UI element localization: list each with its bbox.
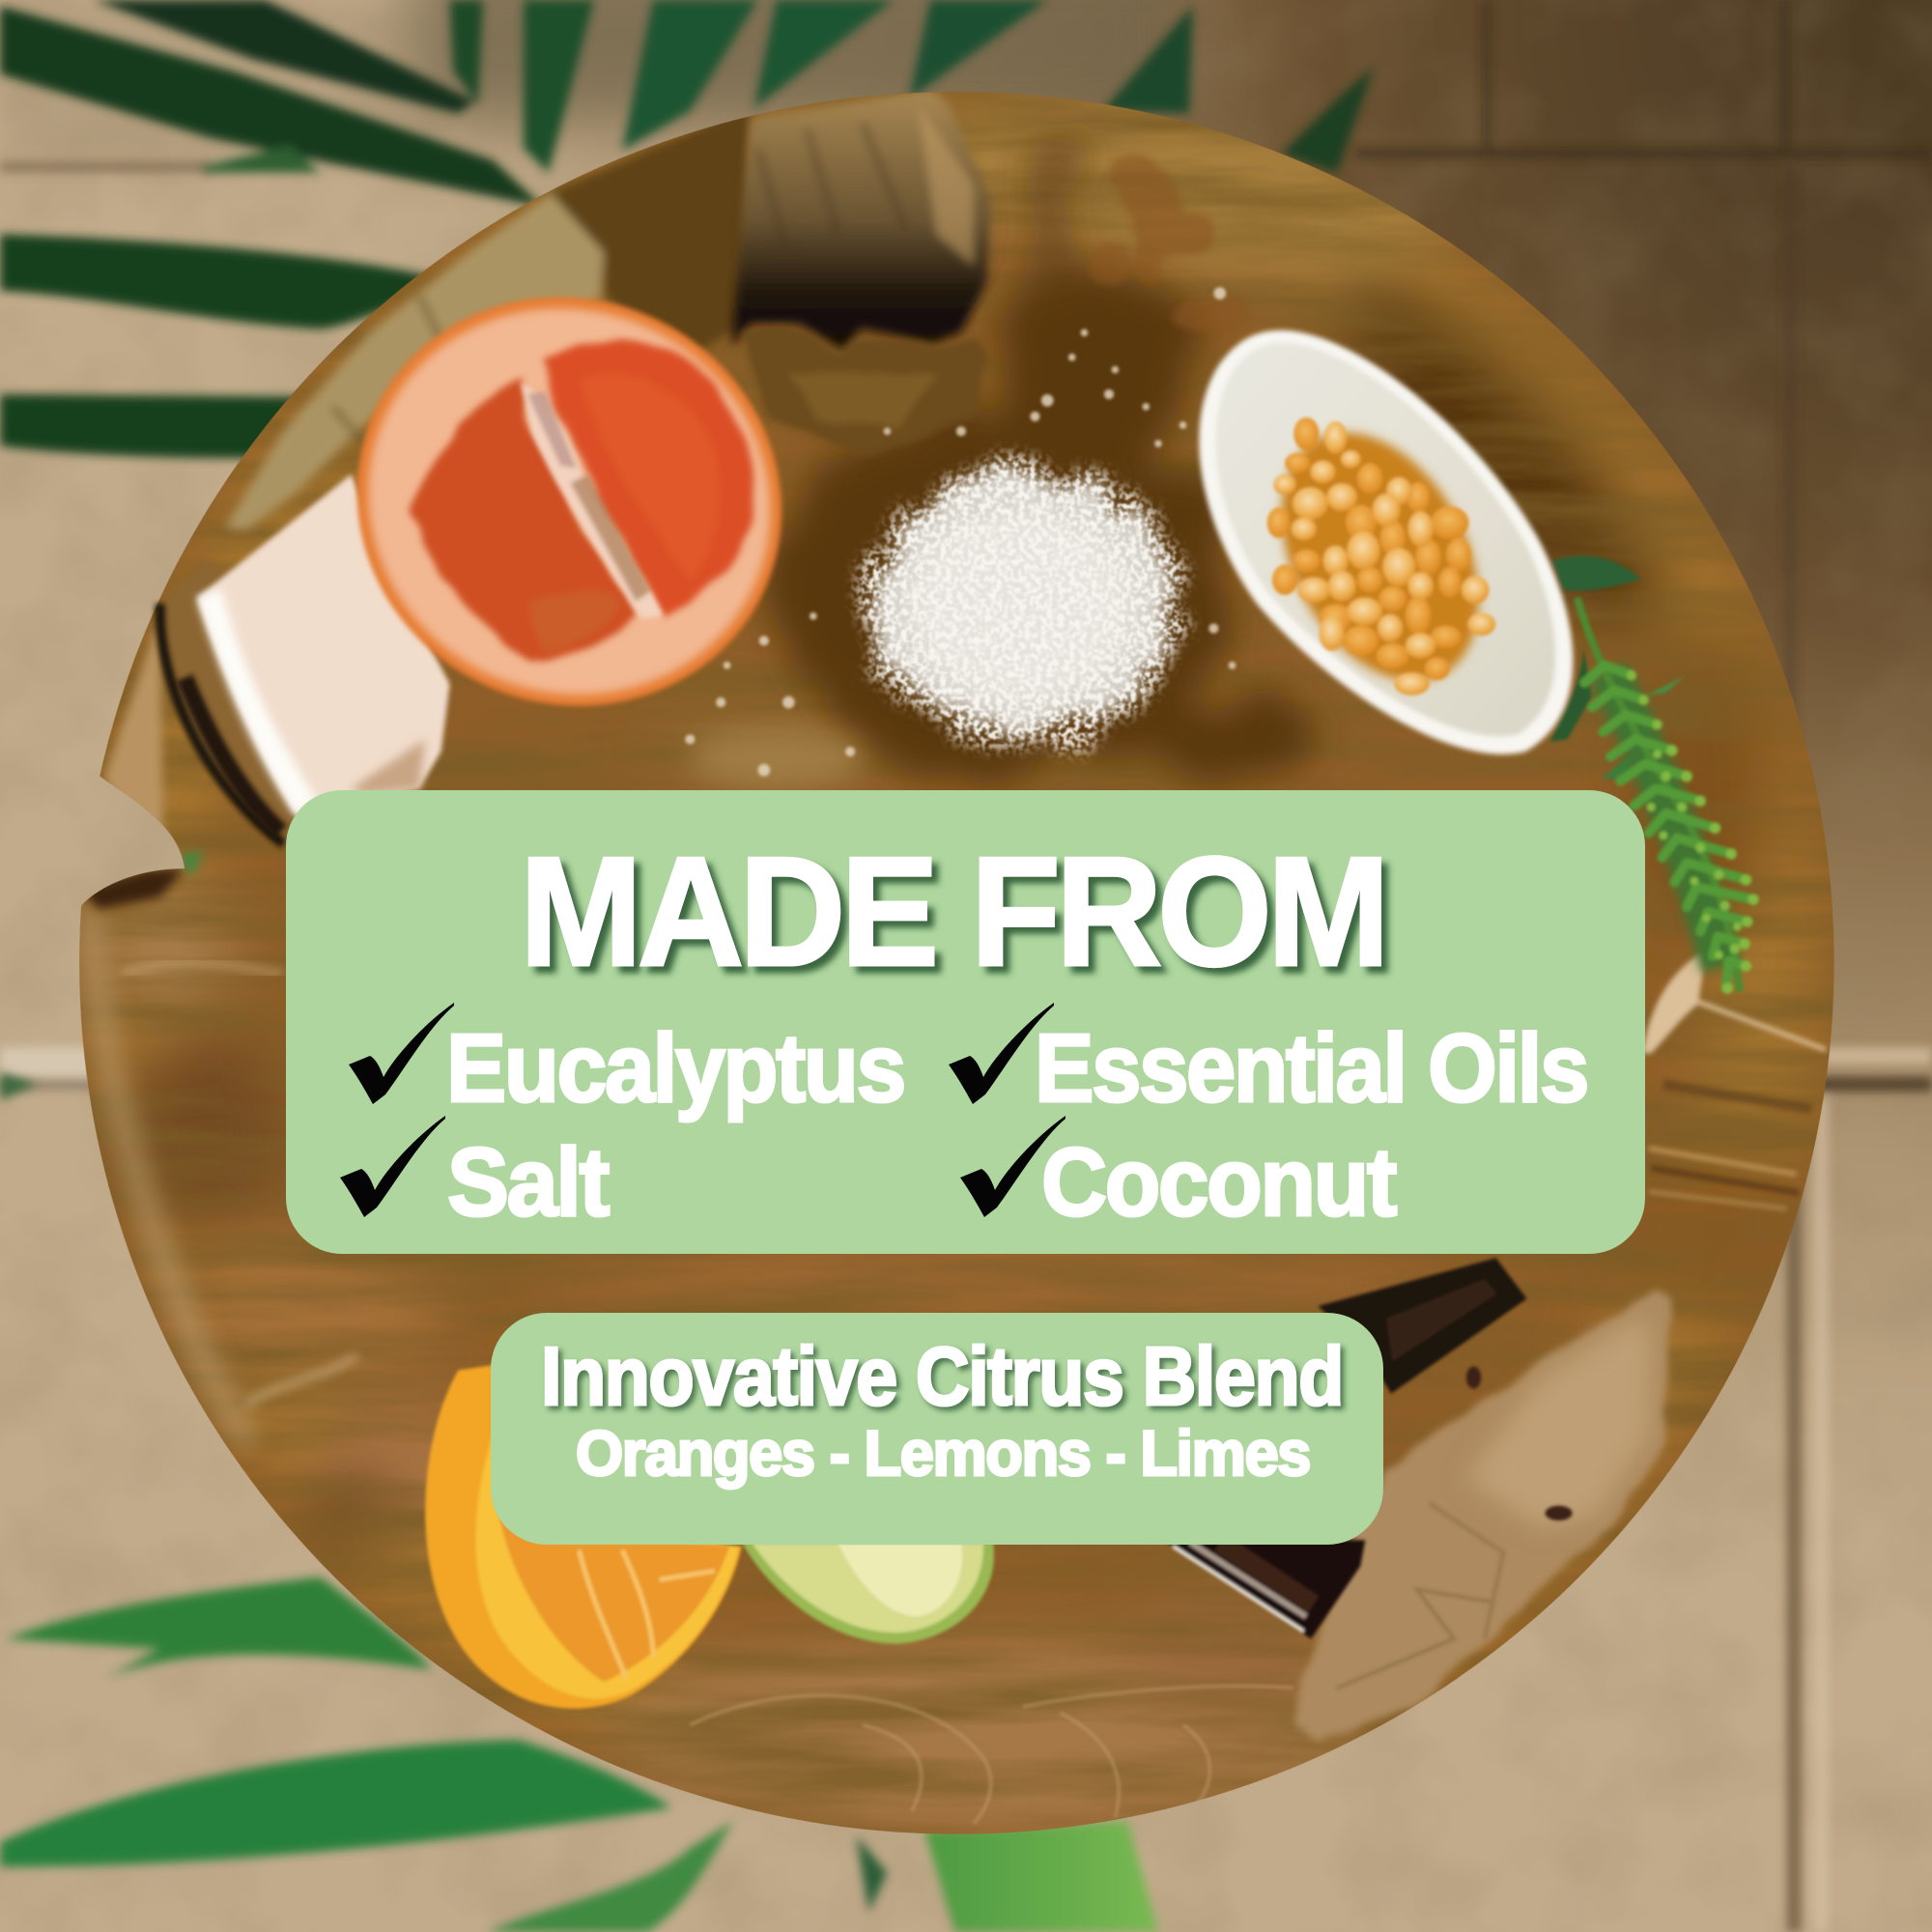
icon: coconut piece [160, 474, 450, 848]
checklist item: salt [340, 1116, 610, 1236]
stain speckles on the wood [685, 287, 1236, 777]
dark wet stain around the salt [777, 160, 1319, 777]
driftwood hollow [732, 89, 991, 350]
palm leaves top left [0, 0, 1374, 1100]
text: fruit list: Oranges - Lemons - Limes [576, 1417, 1310, 1489]
icon: white oval bowl with corn [1199, 330, 1573, 754]
left rim highlights [81, 850, 357, 1444]
icon: amber roller bottle [1163, 1258, 1526, 1638]
bottom grain rings [690, 1686, 1293, 1824]
lower right pale knot [1293, 1290, 1668, 1743]
panel: made from ingredients [286, 790, 1645, 1254]
green leaves bottom [0, 1577, 1158, 1932]
upper left rim [104, 104, 752, 868]
icon: salt pile [801, 407, 1244, 801]
icon: herb sprig [1550, 555, 1759, 994]
checklist item: coconut: Coconut [1041, 1128, 1397, 1236]
checklist item: salt: Salt [447, 1128, 610, 1236]
icon: lime wedge [742, 1543, 994, 1644]
subheading: innovative citrus blend: Innovative Citrus Blend [541, 1331, 1343, 1423]
icon: grapefruit half [290, 228, 849, 776]
checklist item: eucalyptus: Eucalyptus [446, 1014, 904, 1122]
icon: orange slices [425, 1361, 742, 1709]
checklist item: essential oils: Essential Oils [1035, 1014, 1587, 1122]
right pale streaks [1642, 950, 1826, 1208]
stain patches [1092, 153, 1215, 330]
panel: innovative citrus blend [491, 1313, 1383, 1545]
corn kernels [1241, 399, 1519, 715]
heading: made from: MADE FROM [520, 825, 1385, 999]
